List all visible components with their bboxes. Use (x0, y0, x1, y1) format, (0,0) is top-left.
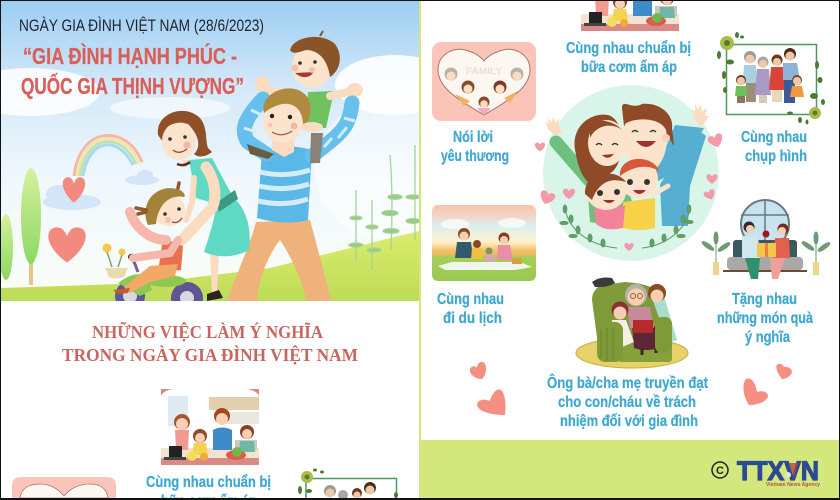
heading: section title (62, 321, 358, 365)
image: cooking together (161, 389, 259, 465)
image: cooking together top (581, 0, 679, 31)
text: loving words caption: Nói lời (453, 129, 493, 146)
icon: decorative hearts right (743, 364, 792, 405)
text: photo caption: chụp hình (745, 148, 807, 165)
hero illustration: family in the park (1, 1, 419, 301)
image: grandmother reading on armchair (576, 278, 688, 368)
heading: slogan: QUỐC GIA THỊNH VƯỢNG” (21, 72, 244, 99)
figure: boy on shoulders (255, 31, 363, 128)
image: love heart card: FAMILY (466, 66, 502, 76)
text: gift caption: Tặng nhau (732, 291, 797, 308)
image: family photo continuation (298, 468, 398, 500)
text: gift caption: ý nghĩa (745, 329, 790, 346)
panel: right page (421, 0, 839, 498)
panel: left page (0, 1, 455, 500)
heading: section title: NHỮNG VIỆC LÀM Ý NGHĨA (92, 321, 323, 342)
heading: slogan: “GIA ĐÌNH HẠNH PHÚC - (23, 42, 237, 69)
text: travel caption: đi du lịch (443, 310, 502, 327)
text: photo caption (741, 129, 807, 165)
image: picnic travel card (432, 205, 536, 281)
text: cooking caption (146, 473, 271, 500)
image: heart card continuation (12, 477, 116, 498)
icon: rainbow (74, 135, 142, 176)
logo: TTXVN: Vietnam News Agency (766, 482, 820, 488)
text: loving words caption: yêu thương (441, 148, 509, 165)
heading: slogan (21, 42, 244, 99)
heading: date line: NGÀY GIA ĐÌNH VIỆT NAM (28/6/2023) (19, 16, 264, 35)
logo: TTXVN: TTXVN (737, 456, 819, 486)
text: grandparents caption: Ông bà/cha mẹ truyền đạt (547, 373, 709, 392)
text: travel caption (437, 291, 504, 327)
icon: hearts (48, 177, 86, 263)
image: family photo frame (717, 32, 825, 124)
figure: father (227, 88, 355, 301)
center illustration: happy family circle (535, 85, 725, 261)
text: gift caption (717, 291, 813, 346)
heading: section title: TRONG NGÀY GIA ĐÌNH VIỆT NAM (62, 344, 358, 365)
text: cooking caption: Cùng nhau chuẩn bị (146, 473, 271, 491)
text: grandparents caption: cho con/cháu về trách (558, 394, 696, 411)
image: gift on sofa (701, 200, 831, 279)
text: cooking caption: Cùng nhau chuẩn bị (566, 39, 691, 57)
icon: clouds (43, 170, 159, 210)
figure: girl on tricycle (102, 183, 203, 314)
text: photo caption: Cùng nhau (741, 129, 807, 146)
boy's legs and hands on father's shoulders (247, 122, 323, 163)
page edge strips (419, 1, 421, 498)
image: love heart card (432, 42, 536, 121)
text: gift caption: những món quà (717, 310, 813, 327)
text: grandparents caption: nhiệm đối với gia đình (560, 413, 698, 430)
figure: mother (158, 111, 250, 301)
icon: grass stalks (349, 145, 420, 270)
icon: decorative hearts left (470, 362, 506, 415)
text: travel caption: Cùng nhau (437, 291, 504, 308)
panel: footer band (421, 440, 839, 498)
text: cooking caption: bữa cơm ấm áp (581, 59, 677, 76)
icon: copyright mark (712, 462, 728, 478)
icon: trees (0, 168, 41, 285)
text: cooking caption (566, 39, 691, 76)
text: loving words caption (441, 129, 509, 165)
icon: copyright mark: C (716, 465, 724, 477)
text: grandparents caption (547, 373, 709, 430)
